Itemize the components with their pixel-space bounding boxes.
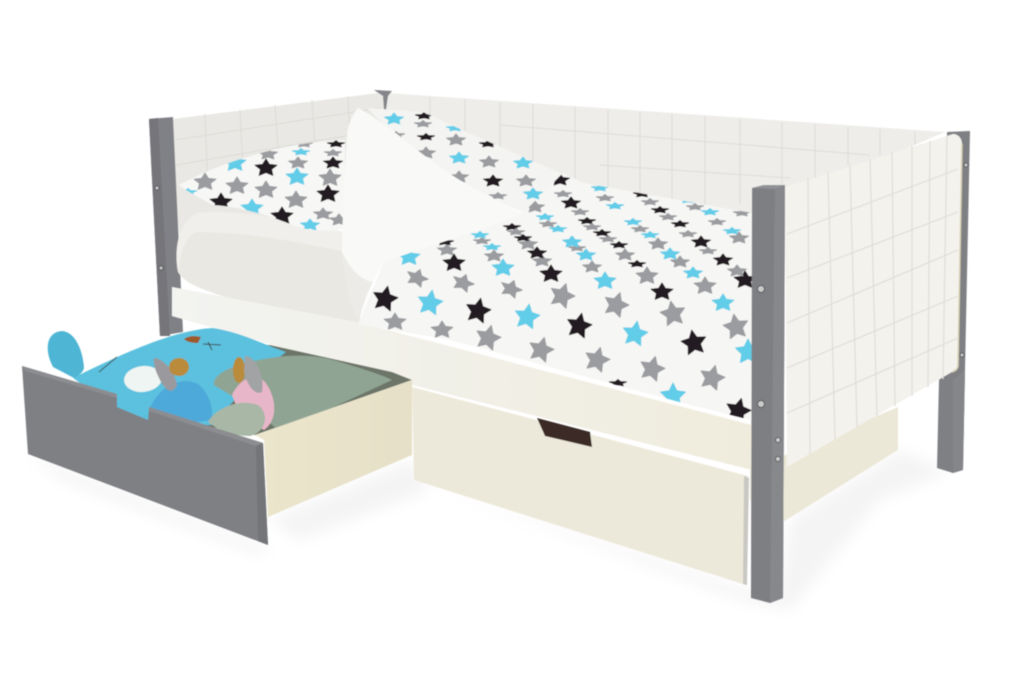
floor shadows xyxy=(30,450,950,610)
white bed rail xyxy=(172,287,752,470)
pink and green bunny toy xyxy=(208,356,274,436)
drawer handle notch xyxy=(537,418,592,447)
lower duvet with star print xyxy=(358,173,760,424)
left drawer gray front xyxy=(22,366,268,545)
blue plush toy xyxy=(150,358,212,426)
right quilted end panel xyxy=(785,134,962,467)
green cushion xyxy=(214,356,392,432)
left drawer side and contents xyxy=(48,328,412,517)
left gray post xyxy=(149,117,183,336)
blue ear of plush pillow xyxy=(48,331,84,378)
drawer interior shadow xyxy=(117,345,412,435)
drawer cream side xyxy=(255,380,412,517)
white duvet fold xyxy=(342,108,522,317)
cream box under right panel xyxy=(750,407,898,522)
left headboard panel xyxy=(173,93,384,240)
back long padded panel xyxy=(385,93,945,220)
mattress xyxy=(177,212,360,324)
bed assembly xyxy=(22,90,970,603)
pillow spot and face xyxy=(99,336,221,394)
back corner post xyxy=(374,90,392,110)
front gray post with bolts xyxy=(751,185,785,603)
upper duvet folded section with stars xyxy=(368,108,534,212)
pillow with star print xyxy=(179,140,348,231)
right storage drawer xyxy=(412,387,749,585)
far right gray post xyxy=(937,131,970,473)
upper duvet stars near fold edge xyxy=(450,171,542,199)
blue plush pillow xyxy=(73,328,286,425)
